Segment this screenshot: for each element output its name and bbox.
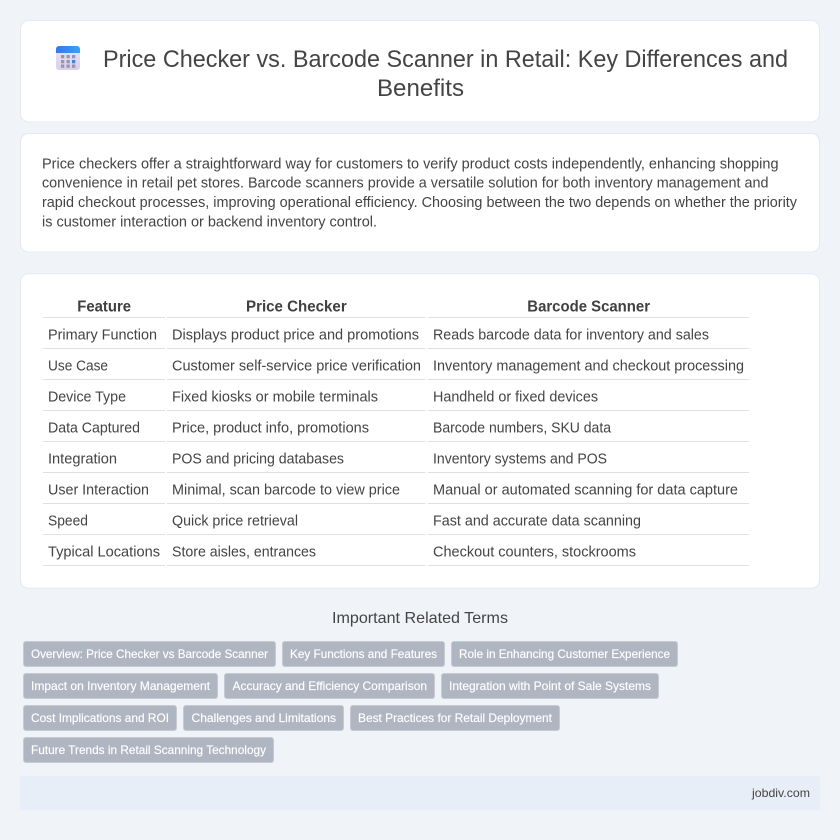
row: integration: POS and pricing databases (172, 451, 344, 467)
intro paragraph: convenience in retail pet stores. Barcode scanners provide a versatile solution for both inventory management and (42, 175, 768, 191)
chip (184, 706, 344, 730)
row: integration: Integration (48, 451, 117, 467)
row: user interaction: Manual or automated scanning for data capture (433, 482, 738, 498)
chip: Cost Implications and ROI (31, 711, 169, 725)
related terms chips (24, 642, 678, 762)
row: data captured: Data Captured (48, 420, 140, 436)
chip: Role in Enhancing Customer Experience (459, 647, 670, 661)
heading: important related terms: Important Related Terms (332, 610, 508, 627)
row: user interaction (48, 482, 738, 498)
icon: calendar grid (56, 46, 80, 70)
row: use case: Inventory management and checkout processing (433, 358, 744, 374)
panel: comparison table (20, 274, 820, 588)
chip (282, 642, 444, 666)
chip (24, 674, 218, 698)
title: Benefits (377, 75, 464, 102)
row: speed (48, 513, 641, 529)
row: device type (48, 389, 598, 405)
intro paragraph: Price checkers offer a straightforward way for customers to verify product costs independently, enhancing shopping (42, 156, 778, 172)
chip: Future Trends in Retail Scanning Technology (31, 743, 266, 757)
footer (20, 776, 820, 810)
chip: Impact on Inventory Management (31, 679, 211, 693)
intro paragraph (42, 156, 798, 230)
row: use case: Use Case (48, 358, 108, 374)
chip: Overview: Price Checker vs Barcode Scanner (31, 647, 268, 661)
row: data captured (48, 420, 611, 436)
chip (452, 642, 678, 666)
panel: introduction (20, 134, 820, 252)
row: typical locations: Typical Locations (48, 544, 160, 560)
row: device type: Device Type (48, 389, 126, 405)
chip (350, 706, 560, 730)
panel: title header (20, 20, 820, 122)
chip (24, 738, 274, 762)
row: user interaction: User Interaction (48, 482, 149, 498)
title: Price Checker vs. Barcode Scanner in Retail: Key Differences and (103, 46, 788, 73)
title (103, 46, 788, 102)
row: integration (48, 451, 607, 467)
chip (24, 706, 176, 730)
row: speed: Speed (48, 513, 88, 529)
row: integration: Inventory systems and POS (433, 451, 607, 467)
row: typical locations: Checkout counters, stockrooms (433, 544, 636, 560)
row: speed: Fast and accurate data scanning (433, 513, 641, 529)
table header row (77, 299, 650, 316)
row: device type: Fixed kiosks or mobile terminals (172, 389, 378, 405)
row: primary function: Reads barcode data for inventory and sales (433, 327, 709, 343)
chip: Best Practices for Retail Deployment (358, 711, 553, 725)
row: use case (48, 358, 744, 374)
chip (24, 642, 276, 666)
row: data captured: Barcode numbers, SKU data (433, 420, 611, 436)
row: typical locations (48, 544, 636, 560)
row: speed: Quick price retrieval (172, 513, 298, 529)
row: typical locations: Store aisles, entrances (172, 544, 316, 560)
chip: Key Functions and Features (290, 647, 437, 661)
chip (224, 674, 434, 698)
row: device type: Handheld or fixed devices (433, 389, 598, 405)
table header row: Feature (77, 299, 131, 316)
chip (442, 674, 658, 698)
table header row: Price Checker (246, 299, 347, 316)
row: use case: Customer self-service price verification (172, 358, 421, 374)
row: primary function: Primary Function (48, 327, 157, 343)
chip: Integration with Point of Sale Systems (449, 679, 651, 693)
row: primary function (48, 327, 709, 343)
chip: Accuracy and Efficiency Comparison (232, 679, 427, 693)
row: data captured: Price, product info, promotions (172, 420, 369, 436)
table header row: Barcode Scanner (527, 299, 650, 316)
row: primary function: Displays product price and promotions (172, 327, 419, 343)
chip: Challenges and Limitations (192, 711, 336, 725)
row: user interaction: Minimal, scan barcode to view price (172, 482, 400, 498)
footer: jobdiv.com (751, 786, 810, 800)
intro paragraph: rapid checkout processes, improving operational efficiency. Choosing between the two depends on whether the priority (42, 195, 798, 211)
intro paragraph: is customer interaction or backend inventory control. (42, 214, 377, 230)
